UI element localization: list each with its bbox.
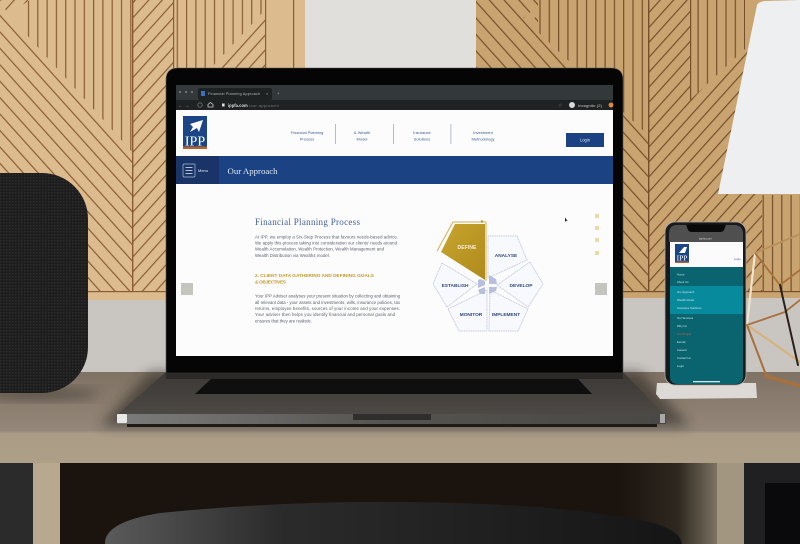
step heading: & OBJECTIVES [255,280,287,286]
top navigation: Methodology [472,136,494,142]
chair back [105,502,682,544]
top navigation: Insurance [413,130,432,135]
IPP logo: IPP [185,134,205,150]
phone IPP logo: IPP [677,254,687,262]
phone menu items: Our Approach [677,290,695,294]
segment: develop: DEVELOP [510,283,533,289]
step paragraph [255,294,401,324]
cursor [565,218,568,222]
top navigation [291,124,494,144]
phone highlighted menu block [670,286,743,314]
top navigation: Investment [473,130,494,135]
segment: monitor: MONITOR [460,312,483,318]
side page indicators [595,214,599,255]
wood panel: left [0,0,305,300]
phone screen top [669,225,743,242]
intro paragraph: Wealth Accumulation, Wealth Protection, Wealth Management and [255,246,385,252]
top navigation: & Wealth [354,130,370,135]
smart speaker [0,173,100,399]
intro paragraph: Wealth Distribution via Wealth4 model. [255,253,330,258]
phone menu items: Events [677,340,686,344]
geometric wire ornament [747,234,800,386]
segment: analyse: ANALYSE [495,253,518,259]
phone menu items: Wealth Model [677,298,694,302]
top navigation: Solutions [414,136,430,142]
laptop lid and bezel [166,68,623,373]
phone menu items: Contact Us [677,356,691,360]
phone menu panel [670,267,743,384]
step paragraph: ensures that they are realistic. [255,318,312,324]
previous button [181,283,193,295]
laptop shadow [100,372,690,426]
browser chrome: /our-approach/ [249,104,279,108]
laptop base [118,372,664,414]
login button: Login [580,138,591,142]
desk surface [0,372,800,463]
browser chrome: ← → [178,103,189,109]
phone web header [670,242,743,267]
menu label: Menu [198,168,208,173]
six-step hexagon diagram [433,220,543,331]
browser chrome: + [277,91,280,96]
phone menu items: Our People [677,332,692,336]
browser chrome: ☆ [558,103,563,109]
table lamp shade [718,0,800,194]
intro paragraph: At IPP, we employ a Six-Step Process that favours needs-based advice. [255,234,398,240]
browser chrome: Financial Planning Approach [208,92,260,96]
step paragraph: Your IPP Adviser analyses your present situation by collecting and obtaining [255,294,401,298]
browser chrome: × [266,91,269,96]
phone notch [686,224,726,232]
phone on stand [656,222,757,399]
phone body [665,222,746,385]
phone IPP logo [675,244,689,263]
segment: establish: ESTABLISH [442,283,469,289]
browser chrome [176,85,613,110]
marble stand [656,383,757,399]
login button [566,133,604,147]
phone url bar: ippfa.com [699,236,713,240]
top navigation: Model [357,136,368,142]
page title: Our Approach [228,166,278,176]
phone menu items: Insurance Solutions [677,306,702,310]
step paragraph: all relevant data - your assets and investments, wills, insurance policies, tax [255,300,401,305]
menu icon [183,164,195,177]
blue title bar [176,156,613,184]
wood panel: right [476,0,800,298]
area under desk [0,463,800,544]
phone login link: Login [734,257,741,261]
browser chrome: ippfa.com [228,103,248,108]
web page background [176,110,613,356]
step paragraph: returns, employee benefits, sources of your income and your expenses. [255,306,400,311]
top navigation: Process [300,136,314,142]
browser chrome: Incognito (2) [578,103,603,108]
phone menu items: Home [677,272,685,276]
phone menu items [677,272,702,368]
phone menu items: Login [677,364,684,368]
intro paragraph [255,234,398,258]
laptop [100,68,690,427]
section heading: Financial Planning Process [255,217,360,227]
diagram centre right [489,275,497,284]
phone menu items: About Us [677,280,689,284]
step heading [255,273,375,286]
diagram centre lower [478,287,497,294]
keyboard [195,379,592,394]
segment: define (active): DEFINE [457,245,477,251]
step paragraph: Your adviser then helps you identify financial and personal goals and [255,312,396,317]
top navigation: Financial Planning [291,130,323,135]
phone home indicator [693,381,720,382]
diagram centre [478,279,485,288]
intro paragraph: We apply this process taking into consideration our clients' needs around [255,240,398,246]
segment: implement: IMPLEMENT [492,312,520,318]
step heading: 2. CLIENT DATA GATHERING AND DEFINING GOALS [255,273,375,279]
laptop front edge [117,414,666,427]
next button [595,283,607,295]
hinge [166,373,623,379]
phone menu items: Why Us [677,324,687,328]
IPP logo [183,116,207,150]
wall background [0,0,800,372]
phone menu items: Careers [677,348,688,352]
phone menu items: Our Services [677,316,694,320]
